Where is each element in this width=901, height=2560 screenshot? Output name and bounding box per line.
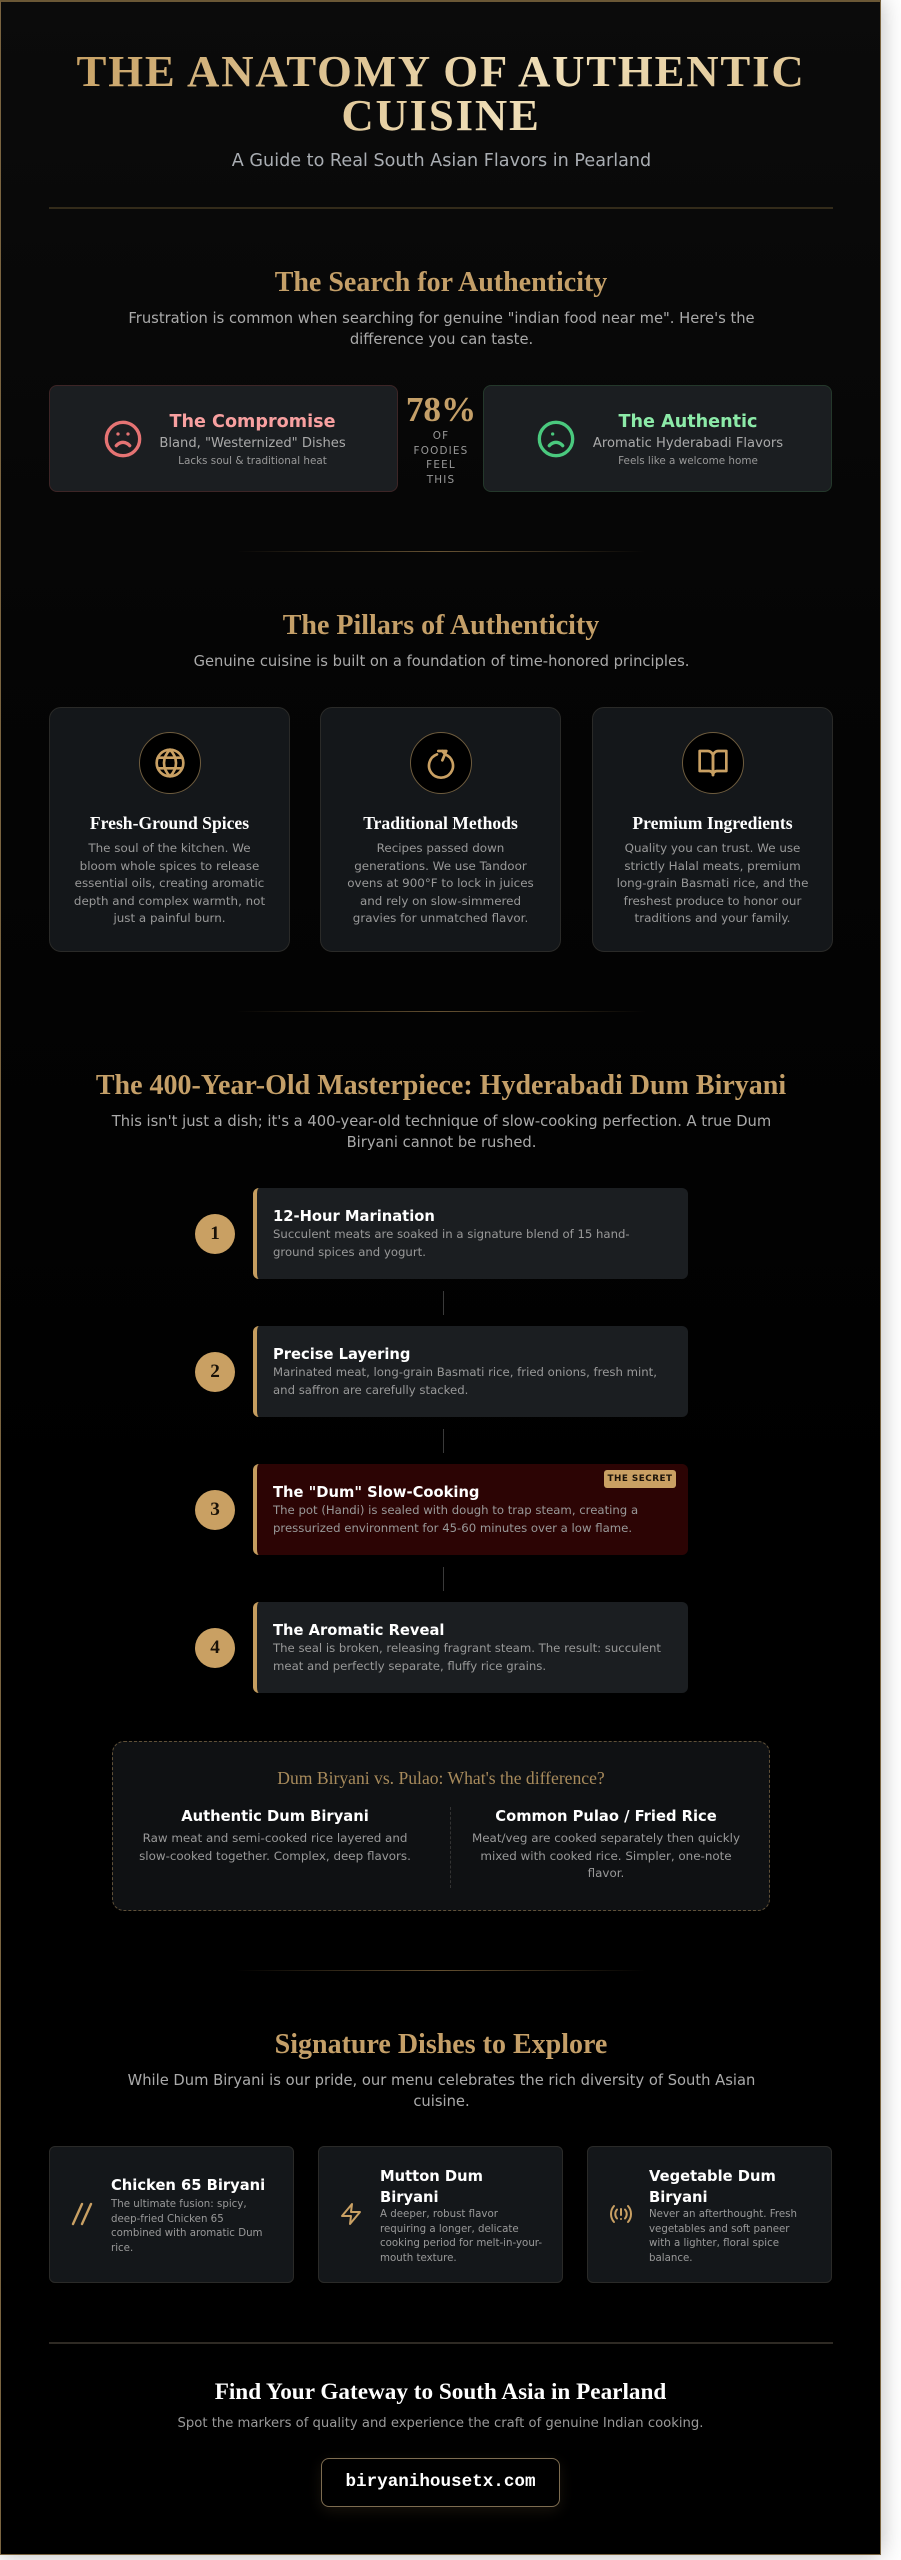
pillar text: generations. We use Tandoor [354,859,527,873]
authentic note: Feels like a welcome home [618,455,758,467]
dish text: The ultimate fusion: spicy, [111,2198,247,2210]
pillar text: essential oils, creating aromatic [75,876,264,890]
stat number: 78% [406,390,476,429]
step title: 12-Hour Marination [273,1208,435,1225]
dish text: deep-fried Chicken 65 [111,2213,224,2225]
step number 2: 2 [210,1361,220,1382]
pillar text: depth and complex warmth, not [74,894,265,908]
stat: 78 percent [406,390,476,486]
step title: The "Dum" Slow-Cooking [273,1484,479,1501]
compromise heading: The Compromise [169,412,336,432]
pillar title: Premium Ingredients [632,813,793,833]
panel: the authentic [483,385,832,492]
dish text [649,2208,797,2264]
icon: lightning bolt [341,2203,361,2225]
icon: radio waves [610,2205,632,2223]
dish text [110,2198,263,2254]
icon: frowning face [104,420,142,458]
compromise description: Bland, "Westernized" Dishes [159,436,346,451]
title: THE ANATOMY OF AUTHENTIC [77,46,805,96]
pillar title: Traditional Methods [363,813,518,833]
footer heading: Find Your Gateway to South Asia in Pearland [215,2379,666,2405]
column text: Meat/veg are cooked separately then quickly [472,1831,740,1845]
intro text: signature dishes: While Dum Biryani is our pride, our menu celebrates the rich diversity of South Asian [128,2072,755,2089]
step number 2 [195,1352,235,1392]
step text [272,1641,661,1673]
dish text [380,2208,542,2264]
icon: rotate arrow [410,732,472,794]
icon: green face [538,420,574,458]
step text: meat and perfectly separate, fluffy rice grains. [273,1659,546,1673]
pillar text [617,841,808,925]
heading: the search for authenticity: The Search for Authenticity [275,267,607,298]
dish text: balance. [649,2252,693,2264]
intro text: signature dishes [128,2072,755,2110]
comparison column: pulao [472,1808,740,1880]
panel: traditional methods [320,707,561,952]
step 2 card [253,1326,688,1417]
dish text: requiring a longer, delicate [380,2223,519,2235]
column text: slow-cooked together. Complex, deep flavors. [139,1849,411,1863]
dish title: Chicken 65 Biryani [111,2177,265,2194]
step text [272,1503,638,1535]
dish text: rice. [111,2242,133,2254]
intro text: masterpiece [112,1113,771,1151]
comparison column: dum biryani [139,1808,411,1863]
heading: signature dishes: Signature Dishes to Explore [275,2029,607,2060]
pillar text: and rely on slow-simmered [360,894,521,908]
panel: dum biryani vs pulao [112,1741,770,1911]
step text: Marinated meat, long-grain Basmati rice, fried onions, fresh mint, [273,1365,657,1379]
header divider [49,207,833,209]
heading: pillars: The Pillars of Authenticity [283,610,599,641]
pillar text: just a painful burn. [113,911,226,925]
stat label: THIS [427,474,455,486]
pillar text: long-grain Basmati rice, and the [617,876,808,890]
step title: The Aromatic Reveal [273,1622,444,1639]
dish text: cooking period for melt-in-your- [380,2237,542,2249]
stat label [414,430,468,486]
dish title: Vegetable Dum [649,2168,776,2185]
title: CUISINE [341,90,541,140]
website button: biryanihousetx.com [345,2472,536,2492]
title [49,49,833,137]
column text: mixed with cooked rice. Simpler, one-note [480,1849,732,1863]
step title: Precise Layering [273,1346,410,1363]
step text [273,1365,657,1397]
column text: Raw meat and semi-cooked rice layered and [143,1831,407,1845]
icon: open book [682,732,744,794]
dish text: A deeper, robust flavor [380,2208,498,2220]
heading: masterpiece: The 400-Year-Old Masterpiece: Hyderabadi Dum Biryani [96,1070,786,1101]
pillar text: strictly Halal meats, premium [624,859,801,873]
intro text: signature dishes: cuisine. [413,2093,470,2110]
website button [321,2458,560,2507]
panel: the compromise [49,385,398,492]
pillar text: The soul of the kitchen. We [88,841,251,855]
stat label: FEEL [426,459,456,471]
column text [472,1831,740,1880]
intro text: pillars: Genuine cuisine is built on a foundation of time-honored principles. [194,653,689,670]
panel: vegetable dum biryani [587,2146,832,2283]
step 4 card [253,1602,688,1693]
step number 3 [195,1490,235,1530]
dish title: Biryani [380,2189,439,2206]
step text: pressurized environment for 45-60 minutes over a low flame. [273,1521,632,1535]
step number 1 [195,1214,235,1254]
step text: Succulent meats are soaked in a signature blend of 15 hand- [273,1227,630,1241]
dish title: Biryani [649,2189,708,2206]
column heading: Common Pulao / Fried Rice [495,1808,717,1825]
authentic description: Aromatic Hyderabadi Flavors [593,436,783,451]
pillar text: traditions and your family. [635,911,790,925]
pillar text [347,841,534,925]
pillar text: Quality you can trust. We use [625,841,800,855]
dish text: mouth texture. [380,2252,457,2264]
pillar text: Recipes passed down [377,841,504,855]
step number 1: 1 [210,1223,220,1244]
column heading: Authentic Dum Biryani [181,1808,369,1825]
subtitle: A Guide to Real South Asian Flavors in Pearland [232,151,651,171]
column text: flavor. [588,1866,624,1880]
dish title: Mutton Dum [380,2168,483,2185]
badge: the secret [604,1470,676,1488]
intro text: search [128,310,755,348]
icon: slashes [72,2202,92,2226]
intro text: search: difference you can taste. [350,331,533,348]
pillar text: ovens at 900°F to lock in juices [347,876,534,890]
pillar text [74,841,265,925]
badge: the secret: THE SECRET [607,1474,673,1484]
compromise note: Lacks soul & traditional heat [178,455,327,467]
pillar title: Fresh-Ground Spices [90,813,249,833]
step text [273,1227,630,1259]
dish title [380,2168,483,2206]
dish text: Never an afterthought. Fresh [649,2208,797,2220]
panel: mutton dum biryani [318,2146,563,2283]
intro text: masterpiece: Biryani cannot be rushed. [347,1134,536,1151]
dish text: combined with aromatic Dum [111,2227,263,2239]
intro text: masterpiece: This isn't just a dish; it's a 400-year-old technique of slow-cooking perfection. A true Dum [112,1113,771,1130]
pillar text: gravies for unmatched flavor. [353,911,528,925]
step 1 card [253,1188,688,1279]
step number 3: 3 [210,1499,220,1520]
step 3 card highlighted [253,1464,688,1555]
step number 4: 4 [210,1637,220,1658]
dish title [649,2168,776,2206]
step text: The pot (Handi) is sealed with dough to trap steam, creating a [273,1503,638,1517]
pillar text: bloom whole spices to release [80,859,259,873]
pillar text: freshest produce to honor our [624,894,801,908]
comparison title: Dum Biryani vs. Pulao: What's the difference? [277,1768,605,1788]
icon: globe [139,732,201,794]
footer text: Spot the markers of quality and experience the craft of genuine Indian cooking. [178,2416,703,2431]
stat label: OF [433,430,449,442]
dish text: with a lighter, floral spice [649,2237,779,2249]
step text: and saffron are carefully stacked. [273,1383,468,1397]
step text: ground spices and yogurt. [273,1245,426,1259]
authentic heading: The Authentic [618,412,758,432]
stat label: FOODIES [414,445,468,457]
column text [139,1831,411,1863]
panel: chicken 65 biryani [49,2146,294,2283]
panel: fresh-ground spices [49,707,290,952]
panel: premium ingredients [592,707,833,952]
step text: The seal is broken, releasing fragrant steam. The result: succulent [273,1641,661,1655]
dish text: vegetables and soft paneer [649,2223,790,2235]
intro text: search: Frustration is common when searching for genuine "indian food near me". Here's the [128,310,755,327]
step number 4 [195,1628,235,1668]
